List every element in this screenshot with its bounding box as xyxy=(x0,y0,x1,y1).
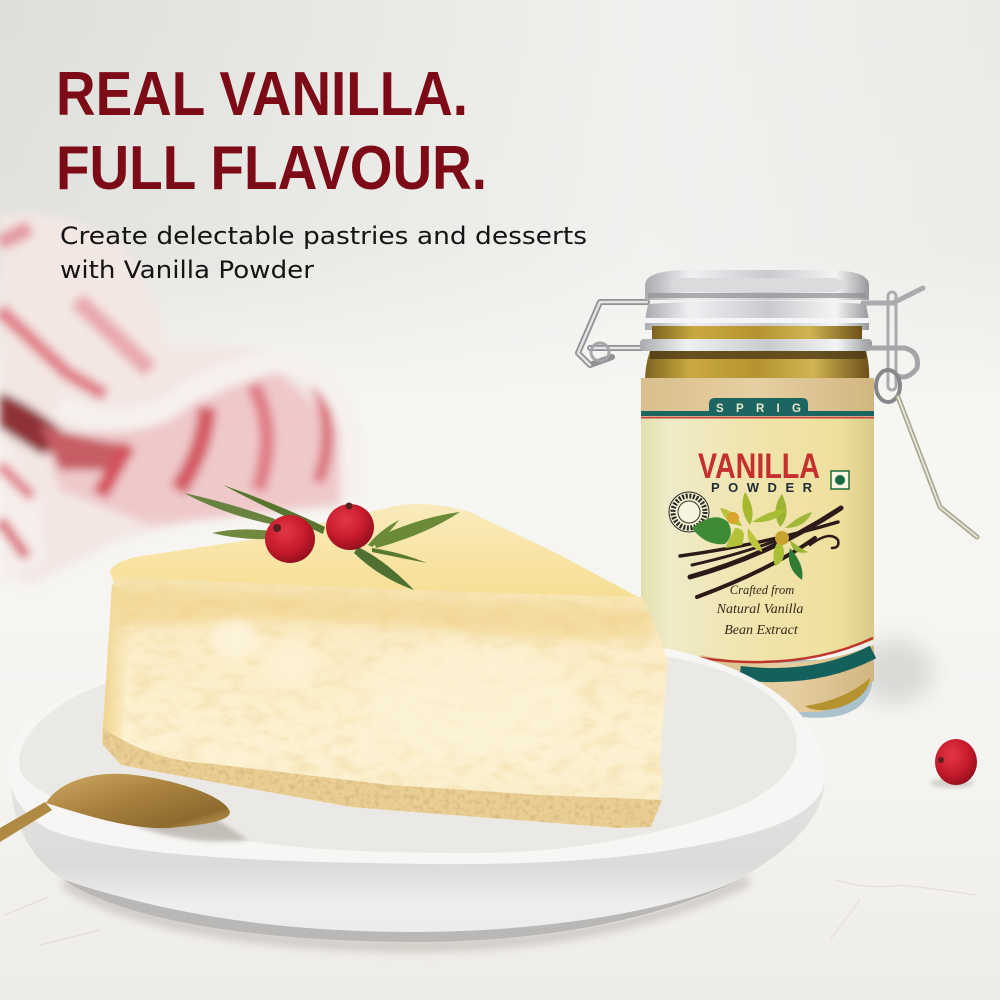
biscuit crust xyxy=(103,728,662,828)
cake left edge xyxy=(102,585,132,745)
gold shoulder xyxy=(645,351,869,382)
vanilla beans xyxy=(680,508,841,597)
wire clasp left xyxy=(578,302,647,365)
right berry xyxy=(326,504,374,550)
cake front xyxy=(102,577,668,828)
subtitle xyxy=(60,222,587,284)
crumb texture xyxy=(102,577,668,828)
jar lid xyxy=(645,270,869,330)
gold spoon xyxy=(0,774,248,842)
cake top face xyxy=(110,504,648,612)
plate xyxy=(8,642,825,946)
blurred red and white striped towel xyxy=(0,213,356,585)
teal top line xyxy=(641,411,874,416)
plate base band xyxy=(64,877,746,942)
veg mark xyxy=(831,471,849,489)
script text: Crafted from xyxy=(730,583,794,597)
plate underside xyxy=(10,770,825,942)
left berry xyxy=(265,515,315,563)
subtitle: Create delectable pastries and desserts xyxy=(60,222,587,250)
product subname: POWDER xyxy=(711,480,813,495)
red berries on cake xyxy=(265,502,374,563)
cheesecake slice xyxy=(102,504,668,828)
title: FULL FLAVOUR. xyxy=(56,134,487,203)
wire clasp right xyxy=(863,288,977,537)
script text: Bean Extract xyxy=(724,623,799,638)
plate rim xyxy=(8,642,825,864)
product name: VANILLA xyxy=(698,447,820,486)
brand tab xyxy=(709,398,808,415)
label xyxy=(641,378,874,712)
stray red berry xyxy=(930,739,977,788)
title xyxy=(56,60,487,203)
script text xyxy=(716,583,803,638)
gold neck xyxy=(652,326,862,341)
jar shadow xyxy=(857,640,933,704)
title: REAL VANILLA. xyxy=(56,60,468,129)
teal lower band xyxy=(740,652,873,675)
brand tab: SPRIG xyxy=(716,403,801,415)
table scratches xyxy=(5,880,975,945)
script text: Natural Vanilla xyxy=(716,602,803,617)
neck wire band xyxy=(640,339,872,351)
plate well xyxy=(19,651,797,853)
gold bottom xyxy=(805,678,870,710)
subtitle: with Vanilla Powder xyxy=(60,256,314,284)
vanilla flowers and leaves xyxy=(692,492,812,580)
product jar xyxy=(578,270,977,718)
spoon handle xyxy=(0,802,52,842)
no artificial stamp xyxy=(669,492,709,532)
upper crumb band xyxy=(115,590,655,755)
plate ground shadow xyxy=(64,880,748,946)
red top line xyxy=(641,416,874,418)
spoon bowl xyxy=(46,774,230,828)
rosemary sprig xyxy=(184,485,460,590)
red lower stripe xyxy=(700,638,873,662)
jar base glass xyxy=(700,660,872,718)
spoon shadow xyxy=(130,818,248,842)
